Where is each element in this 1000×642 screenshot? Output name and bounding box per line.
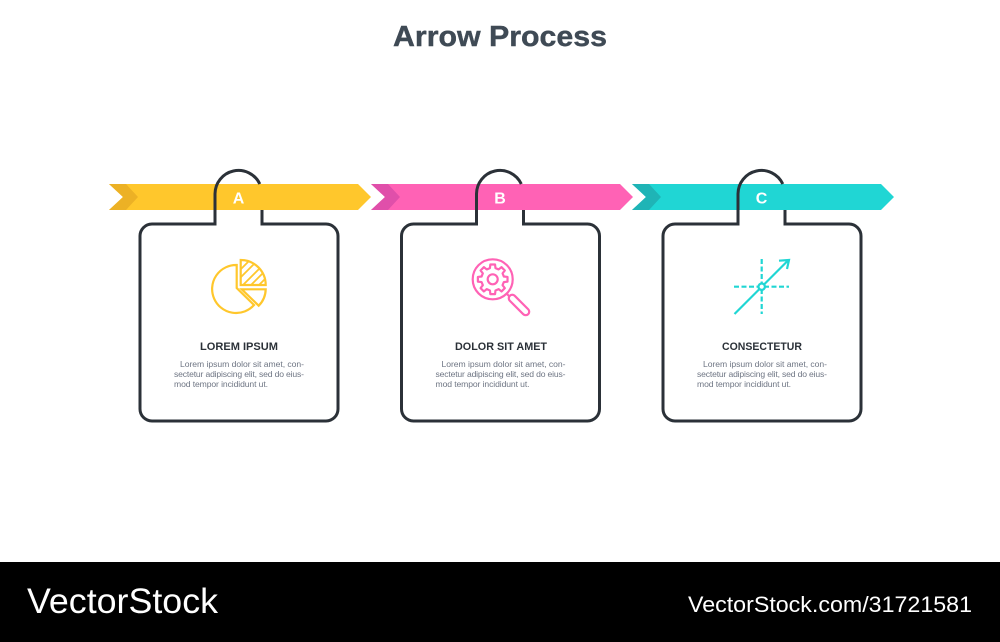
heading: Consectetur: CONSECTETUR [722,341,802,353]
card outline: step C [663,170,861,421]
text block: step B [436,359,566,389]
step letter B: B [494,190,506,208]
step letter A: A [233,190,245,208]
text block: step B: sectetur adipiscing elit, sed do eius- [436,369,566,379]
panel: step C [632,170,894,421]
title: Arrow Process [393,21,607,53]
text block: step A [174,359,304,389]
arrow: step B [371,184,633,210]
arrow: step C [632,184,894,210]
card outline: step A [140,170,338,421]
footer band [0,562,1000,642]
text block: step C: sectetur adipiscing elit, sed do eius- [697,369,827,379]
text block: step A: sectetur adipiscing elit, sed do eius- [174,369,304,379]
heading: Dolor Sit Amet: DOLOR SIT AMET [455,341,547,353]
text block: step C [697,359,827,389]
text block: step A: Lorem ipsum dolor sit amet, con- [180,359,304,369]
text block: step B: mod tempor incididunt ut. [436,379,530,389]
step letter C: C [756,190,768,208]
icon: magnifier with gear [473,259,531,317]
footer URL: VectorStock.com/31721581 [688,592,972,617]
footer logo text: VectorStock [27,582,219,621]
arrow: step A [109,184,371,210]
icon: axis with rising arrow [734,259,789,314]
text block: step C: Lorem ipsum dolor sit amet, con- [703,359,827,369]
panel: step A [109,170,371,421]
panel: step B [371,170,633,421]
text block: step A: mod tempor incididunt ut. [174,379,268,389]
text block: step B: Lorem ipsum dolor sit amet, con- [442,359,566,369]
card outline: step B [402,170,600,421]
text block: step C: mod tempor incididunt ut. [697,379,791,389]
icon: pie chart [212,260,268,313]
heading: Lorem Ipsum: LOREM IPSUM [200,341,278,353]
